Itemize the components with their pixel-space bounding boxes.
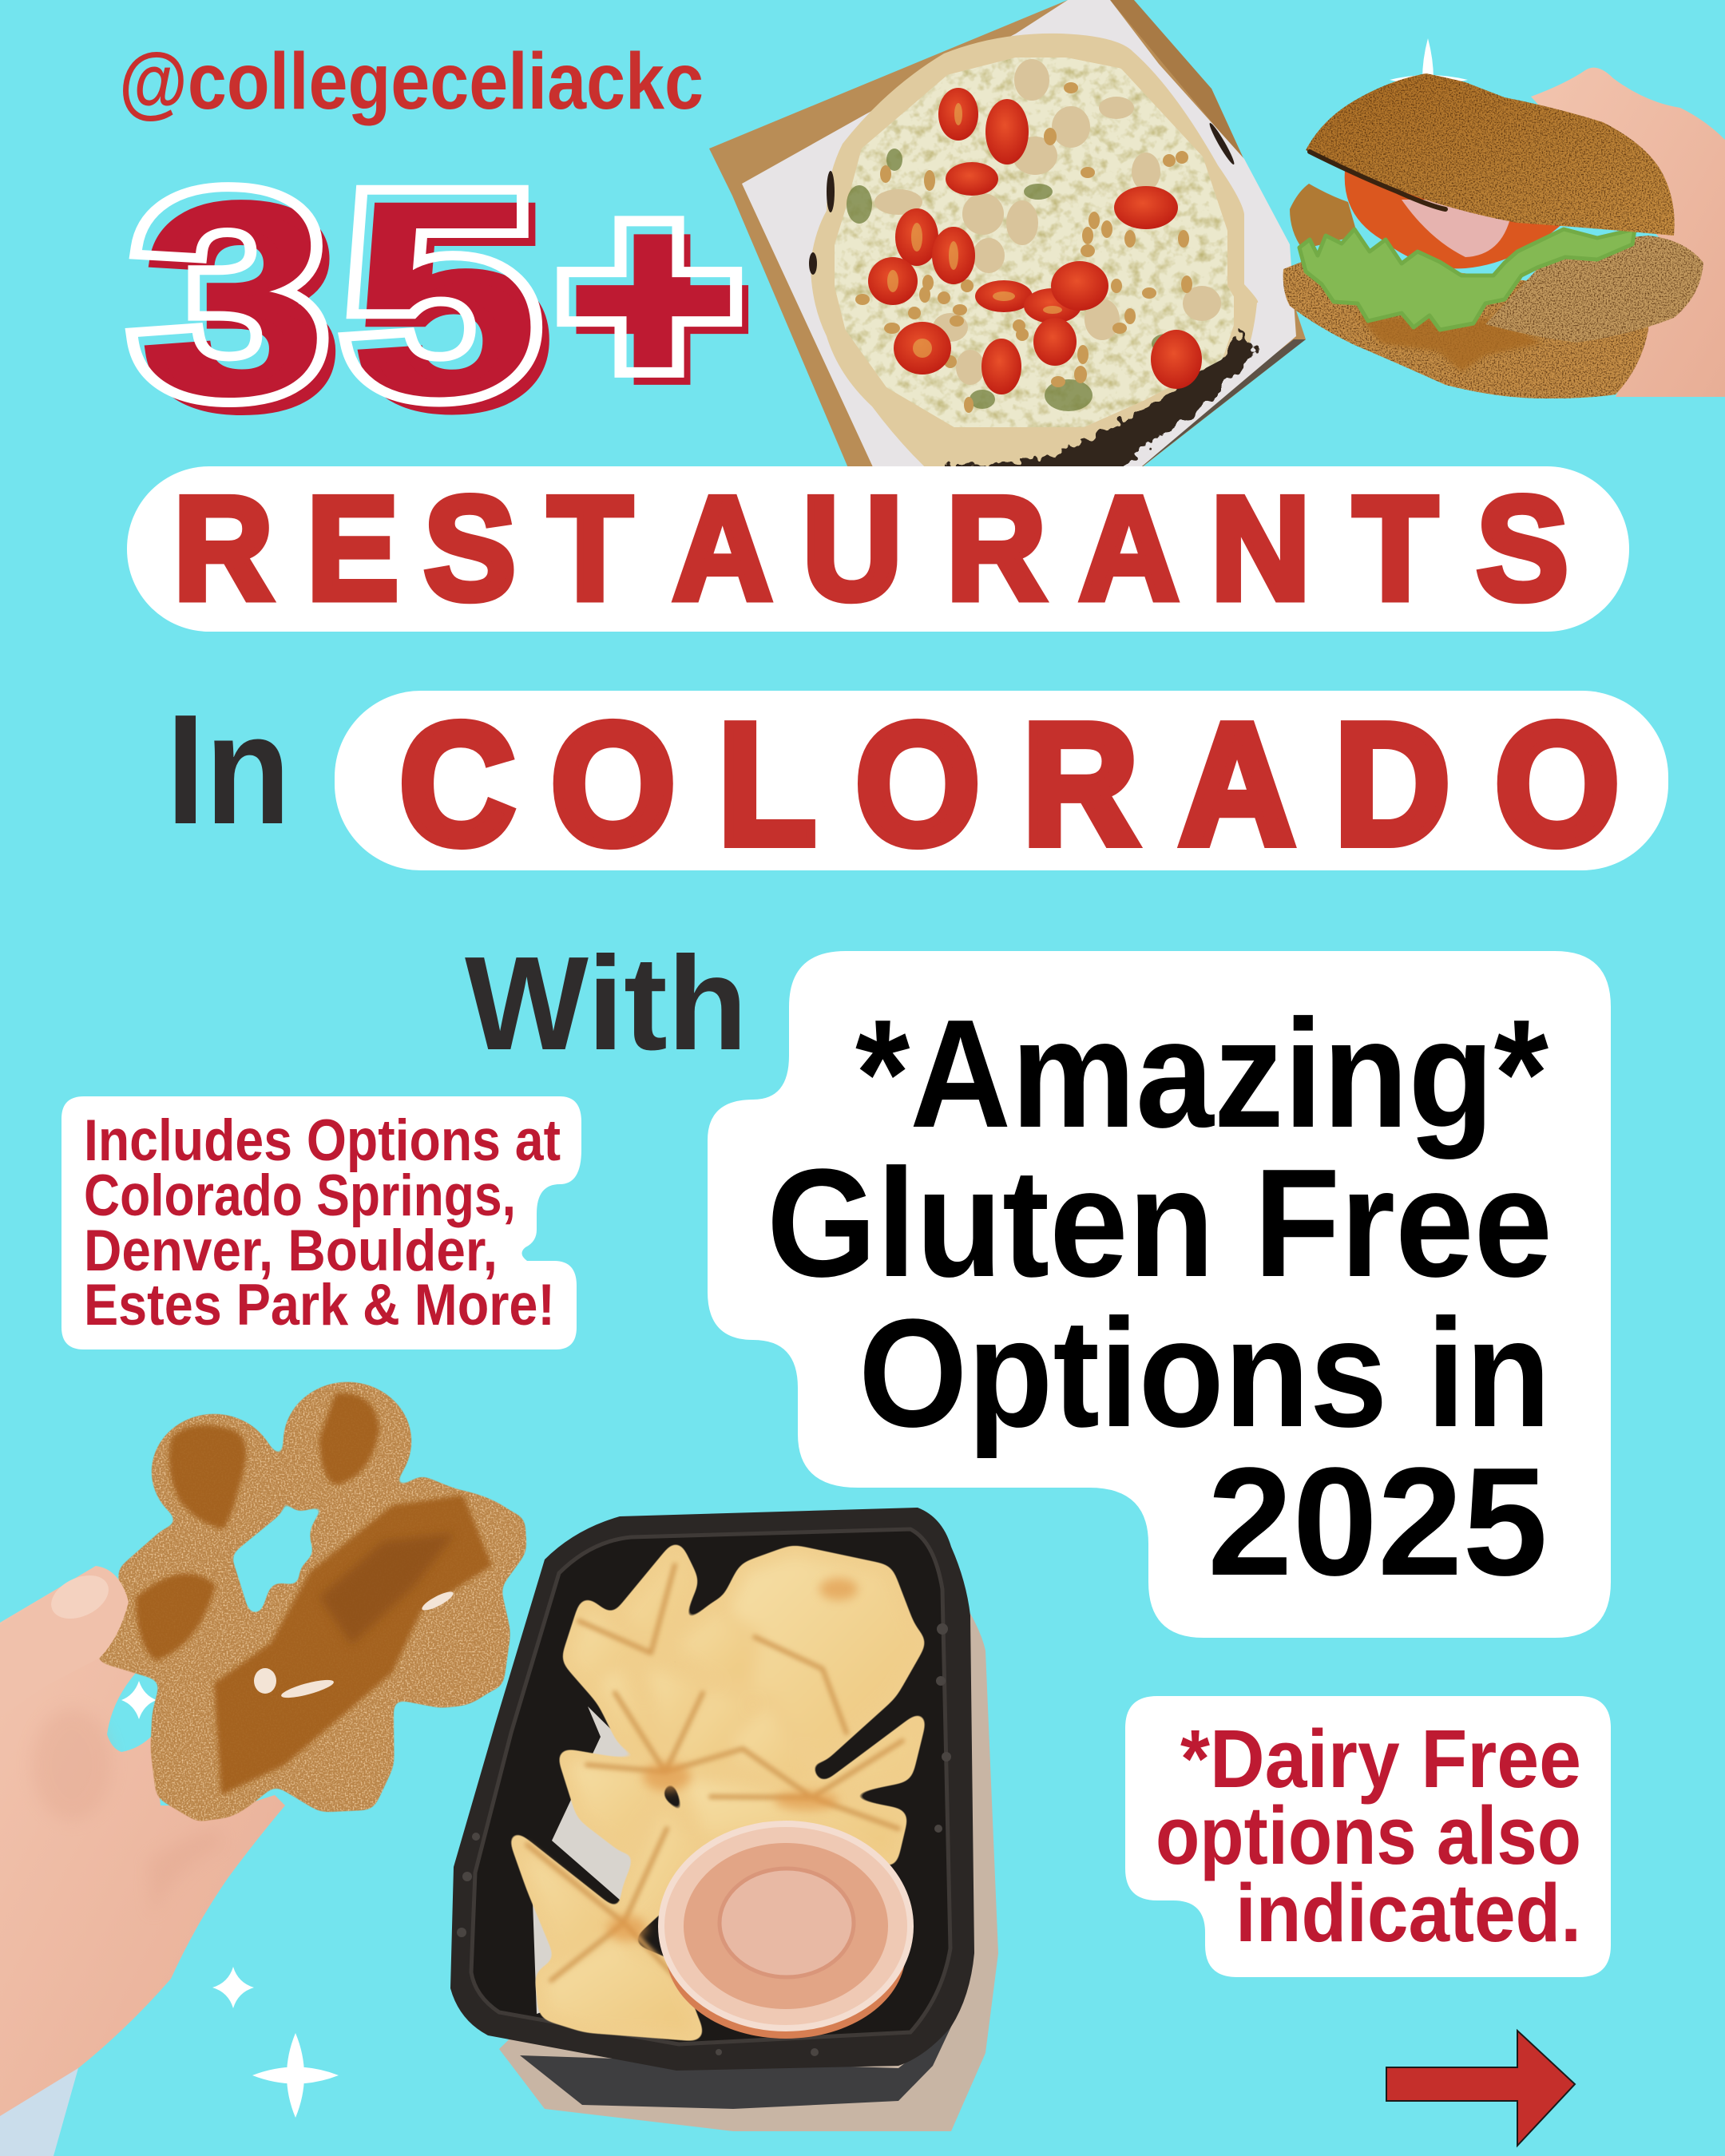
pesto xyxy=(847,149,1180,411)
palm shading xyxy=(32,1709,224,1916)
callout text: Options in xyxy=(859,1286,1551,1459)
fried chicken left piece xyxy=(1290,184,1358,249)
panel: cities callout xyxy=(61,1096,581,1349)
cities text xyxy=(84,1108,561,1338)
text: RESTAURANTS: RESTAURANTS xyxy=(173,466,1568,630)
glaze dark core xyxy=(319,1533,455,1645)
water droplets xyxy=(457,1623,951,2056)
finger over donut xyxy=(0,1566,129,1717)
fried chicken xyxy=(1485,236,1703,343)
top bun xyxy=(1306,73,1675,236)
cities text: Colorado Springs, xyxy=(84,1163,516,1228)
callout text: Gluten Free xyxy=(767,1136,1552,1309)
cities text: Denver, Boulder, xyxy=(84,1219,498,1283)
icon: sparkle behind sandwich xyxy=(1390,38,1468,120)
wonton fold lines xyxy=(527,1565,902,1980)
panel: gluten free callout xyxy=(708,951,1611,1638)
text: COLORADO: COLORADO xyxy=(399,688,1620,880)
chicken xyxy=(874,59,1221,385)
panel: RESTAURANTS pill xyxy=(127,466,1629,632)
pizza box cardboard xyxy=(709,0,1306,479)
tomatoes xyxy=(868,88,1202,394)
headline number: 35+: 3 xyxy=(146,149,339,466)
donut glaze xyxy=(136,1393,492,1795)
tomato slice xyxy=(1345,171,1564,268)
photo: donut in hand xyxy=(0,1382,524,2156)
text: In: In xyxy=(166,682,291,857)
icon: sparkle large xyxy=(252,2033,339,2118)
cities text: Estes Park & More! xyxy=(84,1273,555,1338)
icon: sparkle small xyxy=(212,1967,254,2008)
photo: wonton tray xyxy=(450,1508,998,2131)
dairy free text: options also xyxy=(1156,1789,1581,1881)
wonton browned folds xyxy=(607,1578,858,1941)
pine nuts xyxy=(855,82,1192,413)
text: With: With xyxy=(465,929,748,1078)
glaze highlights xyxy=(254,1588,455,1702)
headline number: 35+: 3 xyxy=(133,137,327,453)
arrow xyxy=(1386,2031,1575,2146)
dark char spots xyxy=(809,121,1236,275)
panel: COLORADO pill xyxy=(335,688,1668,880)
icon: sparkle small in hand xyxy=(121,1681,157,1719)
headline number: 35+ xyxy=(125,182,749,415)
callout text xyxy=(767,987,1552,1607)
sleeve xyxy=(0,2068,78,2156)
donut body xyxy=(100,1382,524,1819)
fingernail xyxy=(44,1567,116,1627)
dairy free text: *Dairy Free xyxy=(1180,1713,1581,1805)
cities text: Includes Options at xyxy=(84,1108,561,1173)
hand and palm xyxy=(0,1566,285,2116)
glaze on bottom bun xyxy=(1358,315,1541,371)
lower tray dark band xyxy=(520,2027,951,2109)
headline number: 35+: + xyxy=(576,164,748,449)
headline number: 35+: + xyxy=(563,151,736,436)
charred edge xyxy=(942,331,1255,482)
wontons xyxy=(514,1547,921,2035)
parchment paper xyxy=(742,0,1296,479)
bun char line xyxy=(1310,152,1445,209)
headline number: 35+: 5 xyxy=(357,149,550,466)
lettuce xyxy=(1299,229,1635,330)
cheese topping xyxy=(835,57,1234,427)
paper liner xyxy=(533,1706,639,2014)
black tray xyxy=(450,1508,974,2071)
crust xyxy=(811,34,1258,479)
bottom bun xyxy=(1283,256,1648,398)
tray rim highlight xyxy=(471,1529,950,2044)
handle: @collegeceliackc xyxy=(119,37,704,126)
sauce cup inner xyxy=(684,1843,888,2009)
hand xyxy=(1531,68,1725,397)
callout text: *Amazing* xyxy=(855,987,1549,1159)
sauce cup base xyxy=(666,1866,906,2039)
photo: pizza in box xyxy=(709,0,1306,482)
callout text: 2025 xyxy=(1208,1435,1548,1607)
dairy free text: indicated. xyxy=(1235,1867,1581,1959)
photo: sandwich in hand xyxy=(1283,68,1725,398)
dairy free text xyxy=(1156,1713,1581,1959)
sauce cup lid xyxy=(661,1824,910,2028)
pickled onion xyxy=(1402,200,1511,257)
panel: dairy free callout xyxy=(1125,1696,1611,1977)
tomato seeds xyxy=(887,103,1062,358)
headline number: 35+: 5 xyxy=(344,137,537,453)
lower clear tray xyxy=(499,1600,998,2131)
sauce cup center xyxy=(720,1869,854,1977)
